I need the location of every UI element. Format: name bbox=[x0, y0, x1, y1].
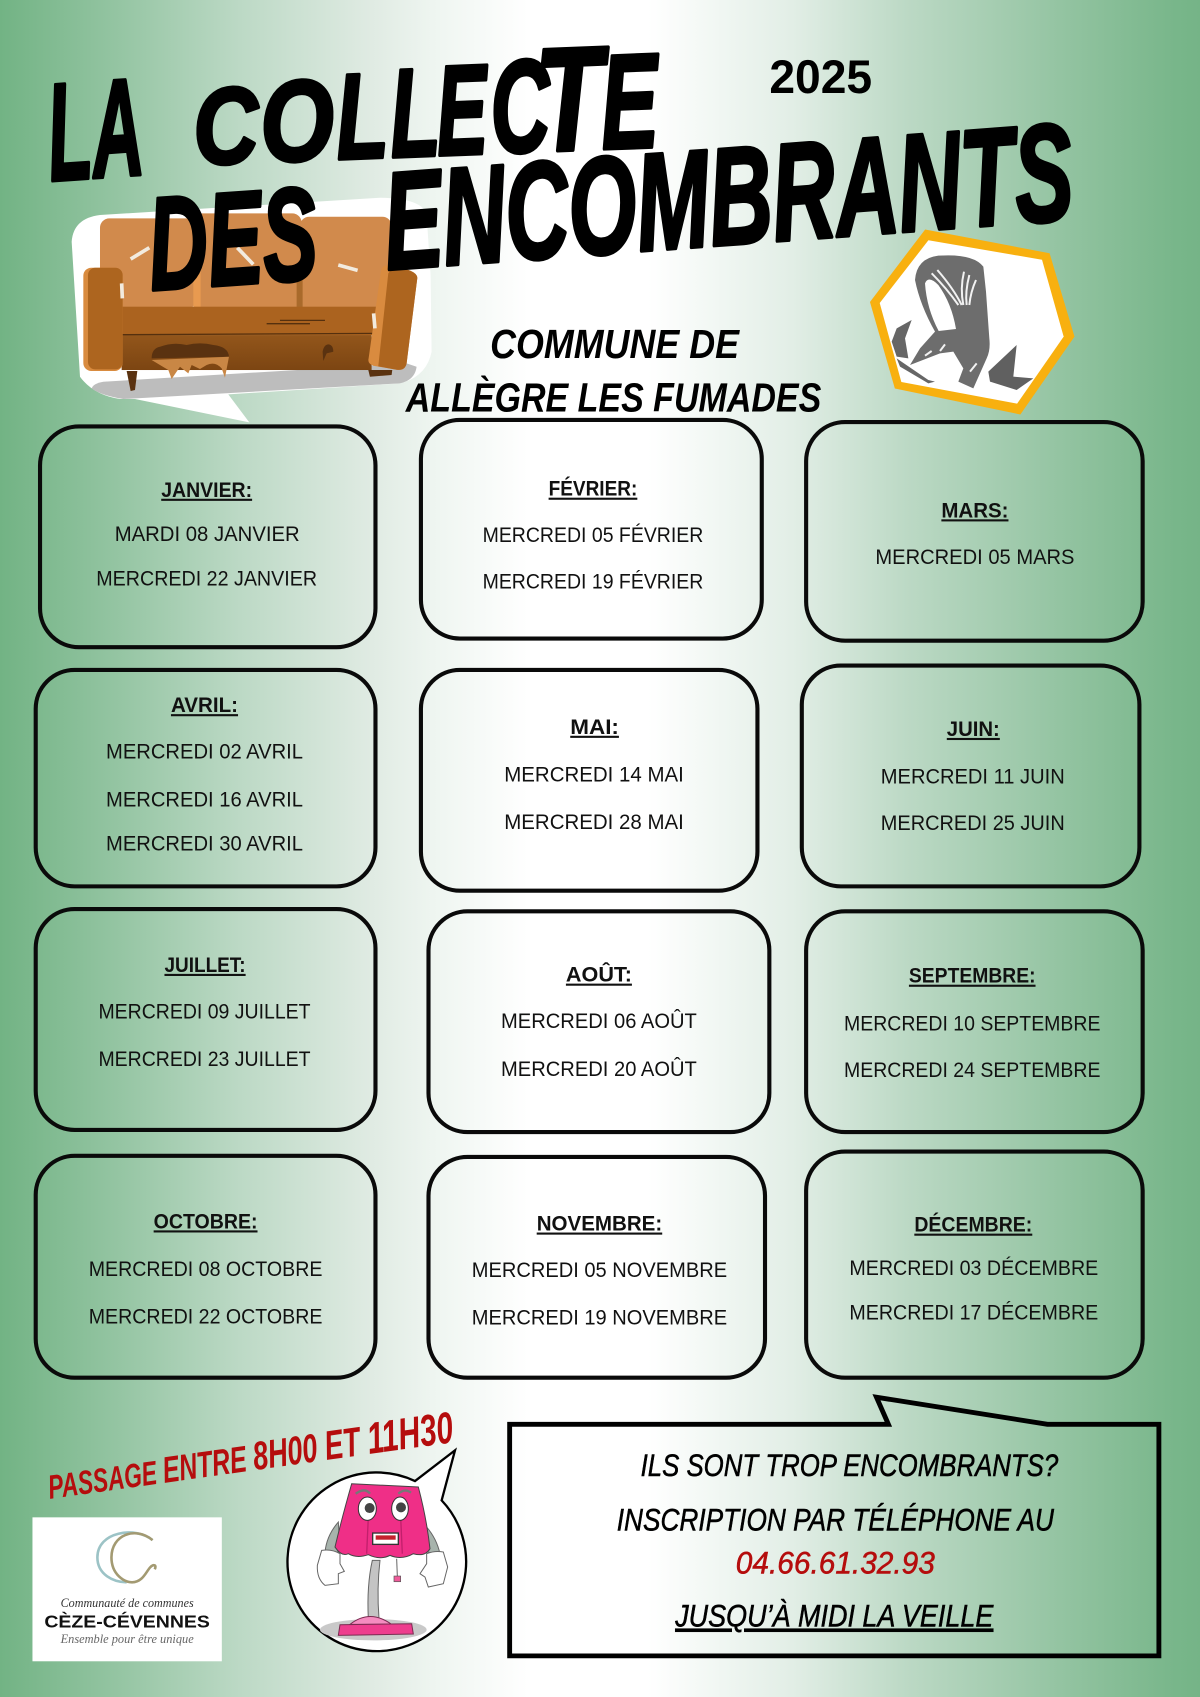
panel: mai: MERCREDI 14 MAI bbox=[504, 763, 684, 786]
panel: janvier: MERCREDI 22 JANVIER bbox=[96, 568, 317, 591]
right arm bbox=[368, 266, 417, 370]
phone number: 04.66.61.32.93 bbox=[736, 1546, 935, 1581]
seat upper bbox=[122, 307, 378, 335]
broken right piece bbox=[988, 345, 1033, 390]
bubble bbox=[287, 1450, 466, 1651]
box outline bbox=[510, 1397, 1159, 1656]
broken chair hexagon icon bbox=[870, 229, 1074, 415]
chair back and seat bbox=[910, 255, 990, 388]
panel: novembre: MERCREDI 19 NOVEMBRE bbox=[472, 1307, 727, 1330]
panel: mai: MERCREDI 28 MAI bbox=[504, 811, 684, 834]
speech box: inscription bbox=[510, 1397, 1159, 1656]
logo background bbox=[32, 1517, 222, 1661]
panel: octobre: MERCREDI 22 OCTOBRE bbox=[89, 1306, 322, 1329]
logo line 2: CÈZE-CÉVENNES bbox=[44, 1612, 210, 1632]
hexagon bbox=[870, 229, 1074, 415]
commune de: COMMUNE DE bbox=[490, 321, 740, 367]
panel: fevrier: FÉVRIER: bbox=[549, 478, 637, 501]
panel: avril bbox=[36, 670, 375, 886]
panel: decembre: MERCREDI 03 DÉCEMBRE bbox=[849, 1257, 1098, 1280]
hexagon interior bbox=[880, 240, 1064, 404]
panel: octobre bbox=[36, 1156, 375, 1378]
panel: juin bbox=[802, 666, 1139, 886]
panel: fevrier bbox=[421, 420, 762, 639]
lamp shade bbox=[335, 1484, 430, 1558]
white bubble bbox=[72, 198, 432, 422]
panel: septembre: MERCREDI 10 SEPTEMBRE bbox=[844, 1012, 1100, 1035]
panel: janvier: JANVIER: bbox=[161, 479, 252, 502]
back slats bbox=[925, 270, 977, 372]
year: 2025 bbox=[769, 51, 872, 104]
panel: aout: MERCREDI 20 AOÛT bbox=[501, 1058, 697, 1081]
panel: janvier bbox=[40, 426, 375, 647]
panel: avril: MERCREDI 16 AVRIL bbox=[106, 788, 303, 811]
panel: juillet: JUILLET: bbox=[164, 954, 246, 977]
logo line 3: Ensemble pour être unique bbox=[60, 1632, 194, 1646]
word: COLLECTE: T bbox=[532, 17, 614, 183]
panel: novembre bbox=[428, 1157, 765, 1378]
word: COLLECTE: E bbox=[598, 27, 663, 178]
torn hole bbox=[152, 343, 229, 358]
chair artwork bbox=[892, 255, 1033, 390]
left glove bbox=[317, 1550, 344, 1585]
panel: octobre: OCTOBRE: bbox=[154, 1210, 258, 1233]
panel: juin: MERCREDI 11 JUIN bbox=[881, 766, 1065, 789]
eyes bbox=[358, 1497, 408, 1520]
brows bbox=[356, 1490, 411, 1494]
panel: novembre: NOVEMBRE: bbox=[537, 1213, 662, 1236]
panel: fevrier: MERCREDI 19 FÉVRIER bbox=[483, 571, 703, 594]
sofa speech bubble illustration bbox=[72, 198, 432, 422]
left leg bbox=[127, 371, 137, 391]
seat lower bbox=[122, 335, 372, 370]
panel: juillet: MERCREDI 09 JUILLET bbox=[98, 1000, 311, 1023]
panel: avril: MERCREDI 30 AVRIL bbox=[106, 833, 303, 856]
subtitle: commune bbox=[405, 321, 821, 420]
callout: passage hours: PASSAGE ENTRE 8H00 ET 11H30 bbox=[44, 1403, 456, 1509]
panel: juillet bbox=[36, 909, 375, 1130]
right leg bbox=[368, 370, 392, 377]
panel: mai bbox=[421, 670, 757, 891]
pull cord bbox=[394, 1559, 401, 1582]
panel: mars bbox=[806, 422, 1143, 641]
sofa back cushions bbox=[100, 213, 392, 310]
mouth bbox=[373, 1533, 398, 1544]
small hole bbox=[323, 344, 333, 361]
foam drips bbox=[152, 357, 229, 379]
panel: mars: MERCREDI 05 MARS bbox=[875, 546, 1074, 569]
panel: mai: MAI: bbox=[570, 716, 619, 739]
panel: avril: AVRIL: bbox=[171, 694, 238, 717]
panel: novembre: MERCREDI 05 NOVEMBRE bbox=[472, 1259, 727, 1282]
lamp base bbox=[338, 1617, 413, 1635]
panel: fevrier: MERCREDI 05 FÉVRIER bbox=[483, 524, 703, 547]
right glove bbox=[420, 1551, 448, 1587]
panel: decembre: DÉCEMBRE: bbox=[914, 1214, 1032, 1237]
panel: juin: MERCREDI 25 JUIN bbox=[881, 812, 1065, 835]
panel: juillet: MERCREDI 23 JUILLET bbox=[98, 1048, 311, 1071]
line 4: JUSQU’À MIDI LA VEILLE bbox=[674, 1599, 994, 1634]
word: COLLECTE: L bbox=[387, 41, 442, 184]
base shadow bbox=[320, 1619, 427, 1640]
word: LA: LA bbox=[42, 50, 148, 211]
panel: septembre: SEPTEMBRE: bbox=[909, 965, 1036, 988]
word: COLLECTE: C bbox=[191, 64, 262, 187]
panel: aout: AOÛT: bbox=[566, 963, 632, 987]
panel: decembre bbox=[806, 1152, 1143, 1378]
panel: juin: JUIN: bbox=[947, 718, 1000, 741]
panel: avril: MERCREDI 02 AVRIL bbox=[106, 741, 303, 764]
stem bbox=[368, 1560, 380, 1619]
cushion seams bbox=[193, 272, 303, 308]
arms bbox=[325, 1522, 440, 1554]
panel: janvier: MARDI 08 JANVIER bbox=[115, 523, 300, 546]
shade folds bbox=[367, 1517, 402, 1554]
word: COLLECTE: C bbox=[488, 31, 554, 181]
line 1: ILS SONT TROP ENCOMBRANTS? bbox=[641, 1448, 1059, 1483]
panel: aout bbox=[428, 911, 769, 1132]
word: DES: DES bbox=[143, 159, 322, 318]
panel: septembre: MERCREDI 24 SEPTEMBRE bbox=[844, 1059, 1100, 1082]
panel: aout: MERCREDI 06 AOÛT bbox=[501, 1010, 697, 1033]
logo: cèze-cévennes bbox=[32, 1517, 222, 1661]
panel: septembre bbox=[806, 911, 1143, 1132]
word: COLLECTE: L bbox=[333, 47, 390, 185]
panel: octobre: MERCREDI 08 OCTOBRE bbox=[89, 1258, 322, 1281]
left arm bbox=[83, 268, 123, 371]
allegre les fumades: ALLÈGRE LES FUMADES bbox=[405, 374, 821, 420]
lamp character bubble bbox=[287, 1450, 466, 1651]
floor shadow bbox=[92, 363, 417, 399]
line 2: INSCRIPTION PAR TÉLÉPHONE AU bbox=[617, 1502, 1054, 1537]
white tears bbox=[122, 248, 375, 328]
word: COLLECTE: O bbox=[258, 56, 336, 187]
panel: mars: MARS: bbox=[941, 499, 1008, 522]
logo line 1: Communauté de communes bbox=[61, 1596, 194, 1610]
word: COLLECTE: E bbox=[434, 38, 492, 183]
logo mark bbox=[97, 1532, 155, 1582]
seat line bbox=[122, 320, 375, 335]
broken left piece bbox=[892, 320, 935, 383]
title: la collecte des encombrants bbox=[42, 15, 1078, 318]
panel: decembre: MERCREDI 17 DÉCEMBRE bbox=[849, 1301, 1098, 1324]
